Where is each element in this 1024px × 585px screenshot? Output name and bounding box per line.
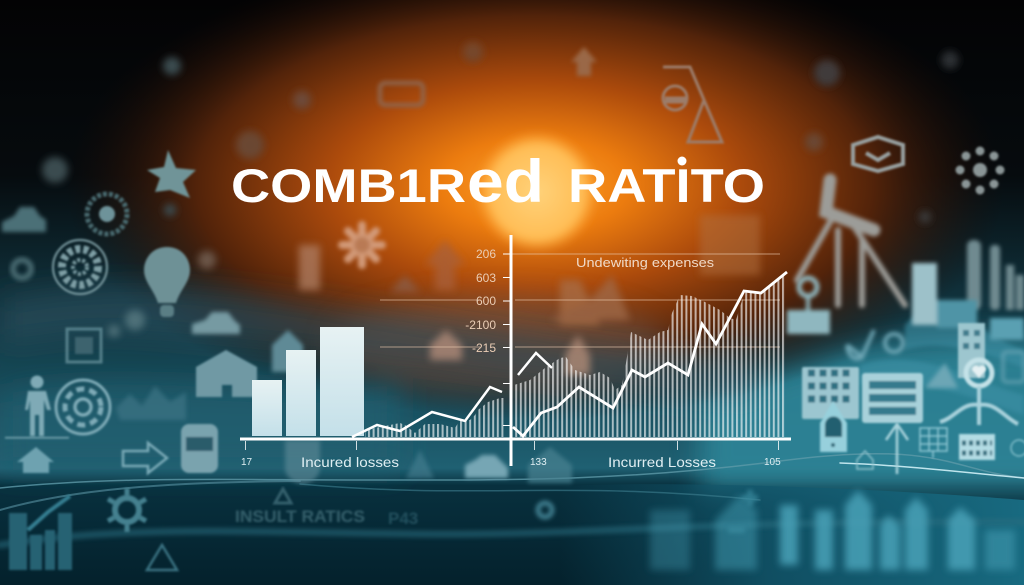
icons: warm blurred shapes: [299, 215, 760, 375]
icon: triangle: [147, 545, 177, 570]
icon: blurred car: [2, 207, 46, 232]
icon: star: [147, 150, 196, 198]
icon: lock: [820, 401, 847, 452]
icons: right cluster: [650, 137, 1024, 570]
axis labels: 603: [476, 271, 496, 285]
line: left series: [352, 387, 502, 437]
icon: office block: [802, 367, 859, 419]
icon: graduation badge: [853, 137, 903, 171]
icon: small gear: [13, 260, 31, 278]
icon: house: [272, 330, 303, 372]
right teal wash: [700, 338, 1024, 490]
stripes right: [514, 272, 785, 437]
axis labels: -2100: [465, 318, 496, 332]
icon: square frame: [67, 329, 101, 362]
icon: blurred dots top: [463, 42, 959, 223]
x axis labels: 133: [530, 457, 547, 468]
title: [231, 148, 765, 215]
icon: arrow: [123, 443, 167, 473]
x axis labels: Incurred Losses: [608, 454, 716, 470]
lower right teal wash: [560, 484, 1024, 585]
panel: chart: [240, 235, 791, 470]
icon: globe: [1011, 440, 1024, 456]
icon: capsule: [380, 83, 423, 105]
icon: solar panel: [920, 428, 947, 458]
x axis labels: [241, 454, 781, 470]
icon: list panel: [862, 373, 923, 423]
line: main series: [513, 272, 787, 436]
line: short series: [518, 353, 552, 375]
x axis labels: 17: [241, 457, 253, 468]
bottom curved lines: [0, 454, 1024, 545]
grey brown haze: [330, 297, 670, 393]
icon: house top: [571, 47, 597, 76]
x axis labels: Incured losses: [301, 454, 399, 470]
icon: light bulb: [144, 247, 190, 317]
icons: bottom left cluster: [9, 488, 418, 570]
wave bands: [0, 287, 760, 470]
icon: tower: [958, 323, 985, 378]
icon: spiral disc: [53, 240, 107, 294]
label: p43: P43: [388, 509, 418, 528]
right wave ridges: [860, 310, 1024, 415]
icon: small triangle: [275, 489, 291, 503]
icon: faint heart and circle: [847, 330, 903, 359]
icon: home: [17, 447, 54, 473]
icons: lower centre faint: [285, 440, 572, 517]
icon: train: [181, 424, 218, 473]
icon: atom gear: [108, 488, 146, 532]
axis labels: 206: [476, 247, 496, 261]
icon: tall bar chart: [912, 263, 1024, 340]
icon: pin and panel: [787, 278, 830, 334]
gridlines: [380, 254, 780, 347]
icon: asterisk: [342, 225, 382, 265]
icon: picture frame: [1003, 352, 1024, 382]
label: insult ratics: INSULT RATICS: [235, 507, 365, 526]
title: COMB1R: [231, 159, 466, 212]
icon: car: [192, 312, 240, 334]
icon: oil rig: [797, 180, 905, 305]
icon: large gear: [56, 380, 110, 434]
icon: blurred dots: [42, 57, 311, 337]
axes: [240, 235, 791, 466]
icon: bottom left bar chart: [9, 496, 72, 570]
icon: small house: [857, 451, 873, 469]
icon: person with heart: [940, 360, 1018, 425]
icon: mountains chart: [116, 386, 186, 420]
sun: [475, 130, 599, 254]
axis labels: -215: [472, 341, 496, 355]
title: RATITO: [568, 159, 765, 212]
axis labels: [465, 247, 496, 355]
icon: blurred skyline bottom right: [650, 490, 1015, 570]
icon: scale lamp: [663, 67, 722, 142]
x axis labels: 105: [764, 457, 781, 468]
label: underwriting expenses: Undewiting expenses: [576, 255, 715, 270]
stripes left: [365, 398, 505, 437]
icon: plus bottom centre: [728, 490, 758, 530]
icon: dot ring: [956, 146, 1004, 194]
title: ed: [467, 148, 544, 215]
icon: mountain: [925, 363, 958, 388]
icon: calculator block: [959, 434, 995, 460]
icon: bank building: [196, 350, 257, 397]
icons: left middle cluster: [5, 312, 303, 473]
icon: gear ring: [87, 194, 127, 234]
icon: up arrow: [886, 424, 908, 474]
axis labels: 600: [476, 294, 496, 308]
icons: upper left cluster: [2, 57, 311, 337]
icon: skyline right: [967, 240, 1024, 310]
bar chart: [252, 327, 364, 436]
icons: top and centre blurred: [285, 42, 959, 517]
icon: person: [5, 376, 69, 438]
